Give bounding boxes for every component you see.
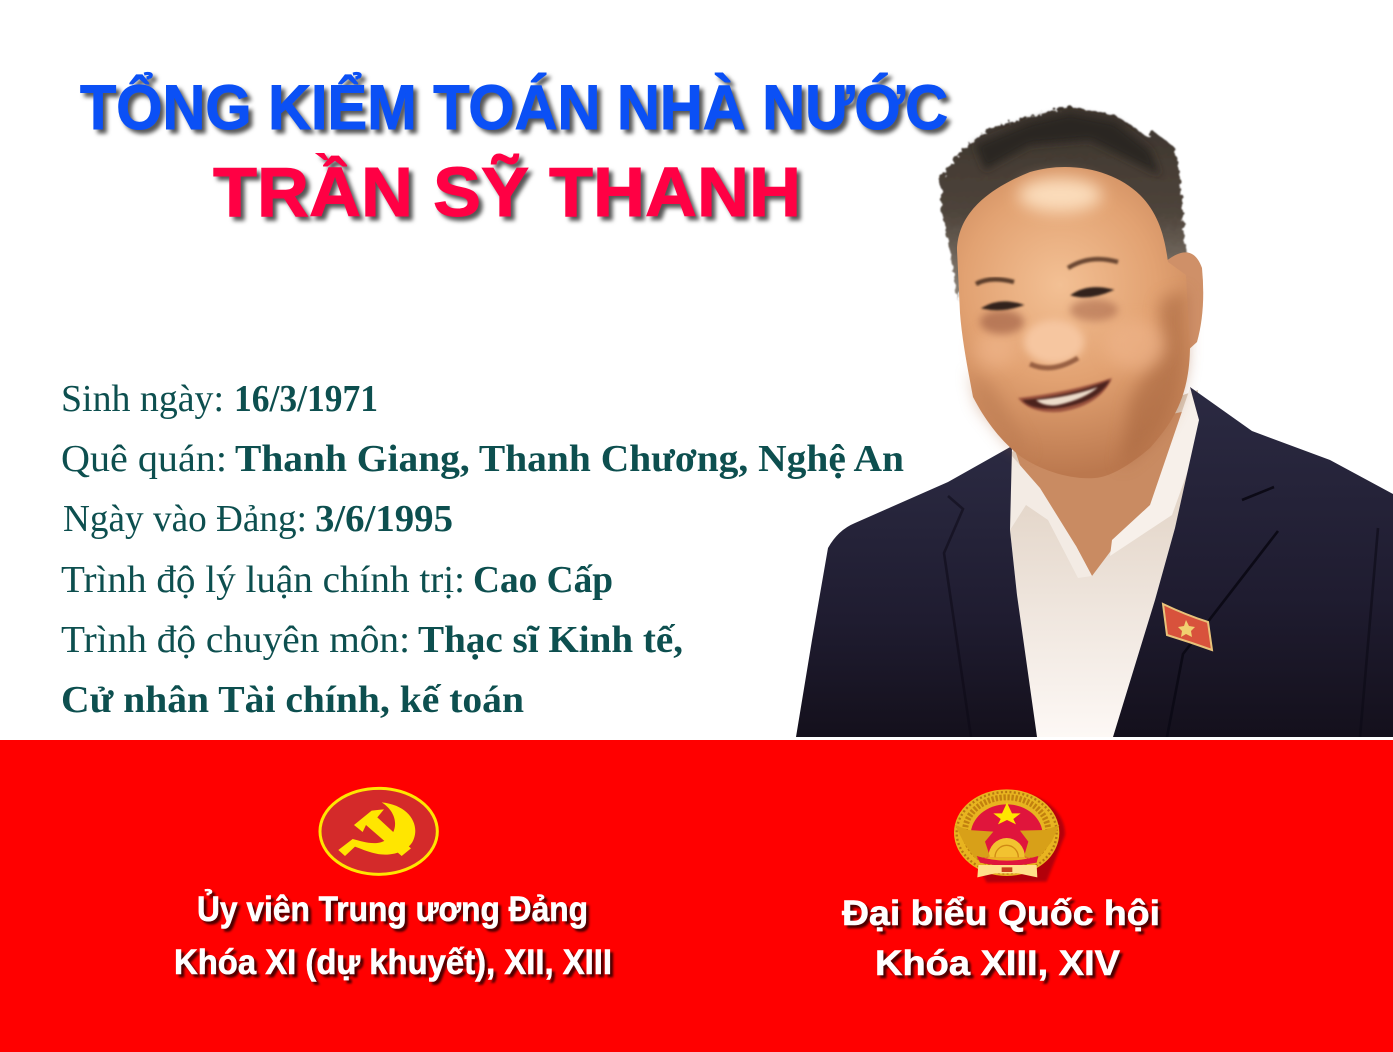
birth date: 16/3/1971 <box>234 378 378 420</box>
national assembly caption <box>842 894 1160 983</box>
icon: party hammer and sickle emblem <box>320 788 437 874</box>
face shading <box>970 178 1186 468</box>
lapel pin <box>1163 604 1212 650</box>
party admission date: Ngày vào Đảng: <box>63 498 307 540</box>
political theory level: Cao Cấp <box>473 559 613 601</box>
eye sockets <box>980 299 1118 334</box>
biography text block <box>61 378 904 721</box>
professional qualification <box>61 619 683 661</box>
title line 1: TỔNG KIỂM TOÁN NHÀ NƯỚC <box>80 72 948 143</box>
eyes <box>983 288 1112 309</box>
party membership caption <box>174 889 612 982</box>
second degree: Cử nhân Tài chính, kế toán <box>61 679 524 721</box>
lapel lines <box>944 487 1378 737</box>
professional qualification: Trình độ chuyên môn: <box>61 619 410 661</box>
white strip above band <box>0 737 1393 740</box>
party admission date <box>63 498 453 540</box>
party admission date: 3/6/1995 <box>315 498 453 540</box>
nose <box>1024 320 1084 368</box>
birth date: Sinh ngày: <box>61 378 224 420</box>
national assembly caption: Đại biểu Quốc hội <box>842 894 1160 933</box>
home town: Thanh Giang, Thanh Chương, Nghệ An <box>235 438 904 480</box>
birth date <box>61 378 378 420</box>
home town: Quê quán: <box>61 438 227 480</box>
party membership caption: Ủy viên Trung ương Đảng <box>197 889 588 929</box>
party membership caption: Khóa XI (dự khuyết), XII, XIII <box>174 943 612 982</box>
right collar <box>1110 388 1199 556</box>
icon: national emblem of Vietnam <box>954 789 1065 883</box>
left collar <box>1010 456 1092 578</box>
mouth <box>1018 378 1112 412</box>
face <box>957 167 1190 478</box>
suit jacket left <box>796 446 1037 737</box>
national assembly caption: Khóa XIII, XIV <box>875 944 1121 983</box>
suit jacket right <box>1113 387 1393 737</box>
hair dark top <box>975 113 1160 175</box>
left brow <box>976 279 1014 284</box>
ear <box>1165 252 1203 353</box>
right brow <box>1068 259 1118 268</box>
political theory level: Trình độ lý luận chính trị: <box>61 559 465 601</box>
hair <box>940 107 1187 300</box>
professional qualification: Thạc sĩ Kinh tế, <box>418 619 683 661</box>
portrait photo illustration <box>796 107 1393 737</box>
title line 2: name: TRẦN SỸ THANH <box>213 153 801 231</box>
neck <box>1015 410 1190 576</box>
shirt <box>1010 390 1198 737</box>
title <box>80 72 948 231</box>
red bottom band <box>0 740 1393 1052</box>
